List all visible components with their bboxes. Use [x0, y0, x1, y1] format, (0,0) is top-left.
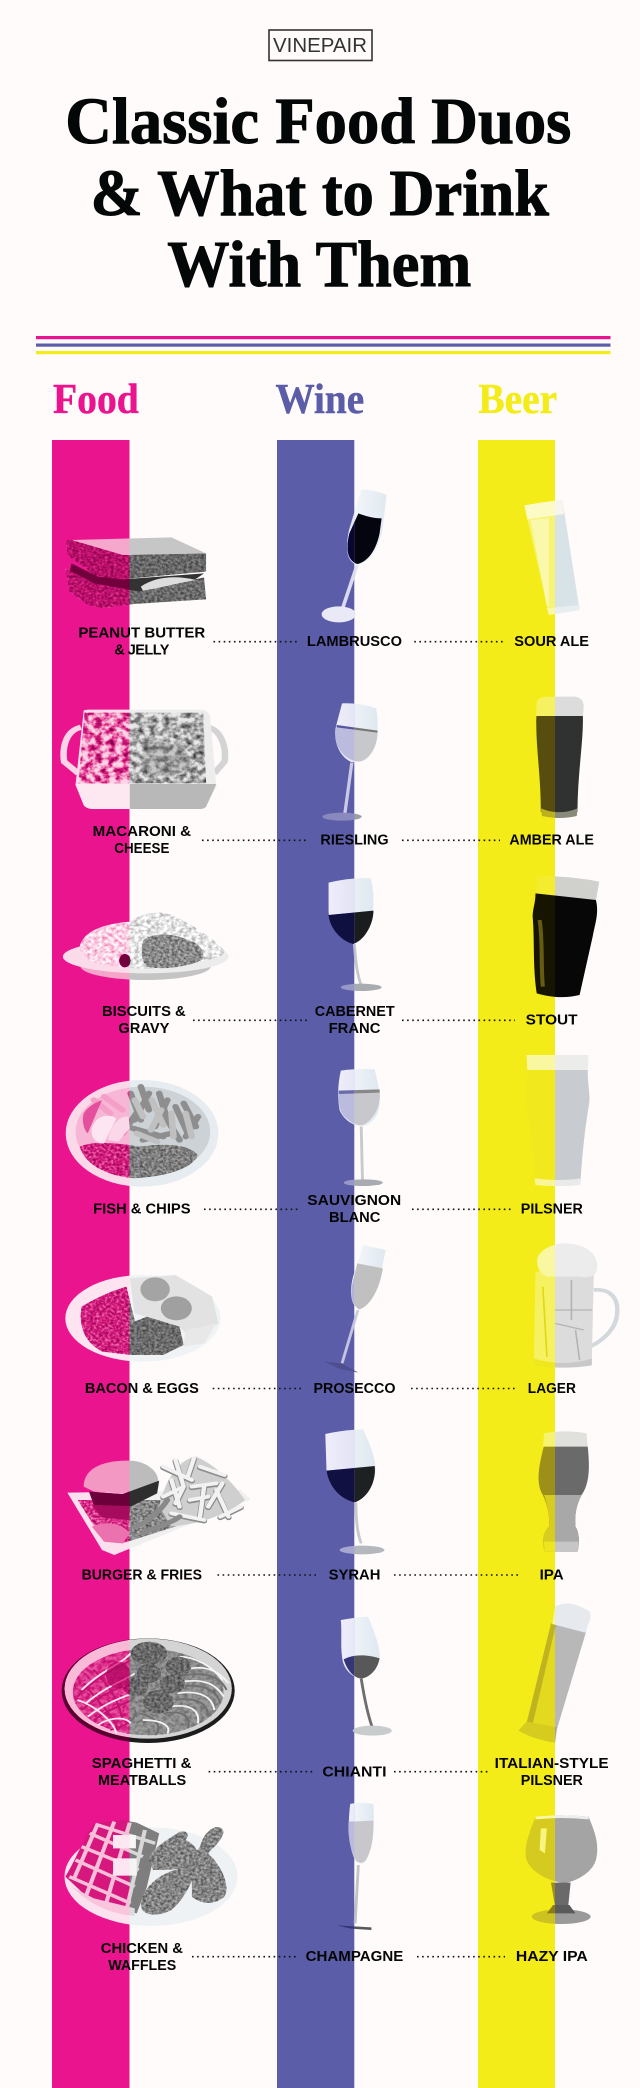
- icon: lager mug: [534, 1243, 617, 1368]
- icon: IPA glass: [539, 1431, 589, 1552]
- row 3 labels: biscuits and gravy: GRAVY: [118, 1021, 170, 1037]
- yellow beer column: [478, 440, 555, 2088]
- row 1 labels: peanut butter and jelly: [78, 626, 589, 658]
- title: [65, 85, 571, 301]
- column heading: Beer: Beer: [478, 377, 557, 423]
- row 6 labels: burger and fries: [82, 1567, 564, 1583]
- title: & What to Drink: [91, 157, 549, 230]
- row 2 labels: macaroni and cheese: RIESLING: [320, 833, 389, 849]
- row 7 labels: spaghetti and meatballs: ITALIAN-STYLE: [495, 1756, 609, 1772]
- row 5 labels: bacon and eggs: [85, 1381, 576, 1397]
- icon: sauvignon blanc glass: [338, 1069, 383, 1186]
- row 8 labels: chicken and waffles: CHAMPAGNE: [306, 1949, 404, 1965]
- row 5 labels: bacon and eggs: LAGER: [528, 1381, 576, 1397]
- icon: amber ale glass: [536, 697, 584, 818]
- row 2 labels: macaroni and cheese: MACARONI &: [93, 824, 192, 840]
- row 1 labels: peanut butter and jelly: SOUR ALE: [514, 634, 589, 650]
- row 4 labels: fish and chips: FISH & CHIPS: [93, 1202, 191, 1218]
- row 3 labels: biscuits and gravy: FRANC: [329, 1021, 381, 1037]
- row 3 labels: biscuits and gravy: CABERNET: [315, 1004, 395, 1020]
- row 6 labels: burger and fries: IPA: [540, 1567, 564, 1583]
- row 4 labels: fish and chips: SAUVIGNON: [307, 1193, 401, 1209]
- logo: VinePair: [269, 30, 372, 60]
- row 3 labels: biscuits and gravy: BISCUITS &: [102, 1004, 186, 1020]
- row 8 labels: chicken and waffles: CHICKEN &: [101, 1941, 183, 1957]
- row 1 labels: peanut butter and jelly: & JELLY: [114, 642, 170, 658]
- row 7 labels: spaghetti and meatballs: PILSNER: [521, 1773, 583, 1789]
- title: With Them: [167, 228, 471, 301]
- row 5 labels: bacon and eggs: BACON & EGGS: [85, 1381, 199, 1397]
- row 8 labels: chicken and waffles: WAFFLES: [108, 1958, 177, 1974]
- title: Classic Food Duos: [65, 85, 571, 158]
- row 3 labels: biscuits and gravy: [102, 1004, 578, 1037]
- column heading: Wine: Wine: [276, 377, 364, 423]
- icon: riesling glass: [322, 703, 378, 821]
- icon: sour ale glass: [524, 500, 580, 615]
- column heading: Food: Food: [53, 377, 139, 423]
- icon: bacon and eggs: [65, 1275, 220, 1362]
- row 8 labels: chicken and waffles: [101, 1941, 588, 1974]
- row 1 labels: peanut butter and jelly: LAMBRUSCO: [307, 634, 402, 650]
- row 3 labels: biscuits and gravy: STOUT: [526, 1012, 578, 1028]
- icon: macaroni and cheese dish: [64, 710, 225, 809]
- row 7 labels: spaghetti and meatballs: MEATBALLS: [98, 1773, 186, 1789]
- icon: chicken and waffles: [64, 1820, 238, 1926]
- row 4 labels: fish and chips: PILSNER: [521, 1202, 583, 1218]
- icon: italian-style pilsner glass: [518, 1603, 591, 1743]
- row 2 labels: macaroni and cheese: [93, 824, 594, 857]
- purple wine column: [277, 440, 354, 2088]
- row 5 labels: bacon and eggs: PROSECCO: [314, 1381, 396, 1397]
- row 6 labels: burger and fries: BURGER & FRIES: [82, 1567, 202, 1583]
- icon: biscuits and gravy: [63, 913, 229, 980]
- icon: pilsner glass: [526, 1055, 590, 1186]
- row 7 labels: spaghetti and meatballs: CHIANTI: [322, 1764, 386, 1780]
- row 2 labels: macaroni and cheese: CHEESE: [114, 841, 170, 857]
- icon: stout glass: [533, 876, 599, 997]
- icon: lambrusco glass: [322, 489, 387, 622]
- row 6 labels: burger and fries: SYRAH: [329, 1567, 380, 1583]
- pink food column: [52, 440, 130, 2088]
- icon: peanut butter and jelly sandwich: [65, 537, 206, 608]
- row 7 labels: spaghetti and meatballs: SPAGHETTI &: [92, 1756, 192, 1772]
- row 4 labels: fish and chips: [93, 1193, 583, 1226]
- row 1 labels: peanut butter and jelly: PEANUT BUTTER: [78, 626, 206, 642]
- row 8 labels: chicken and waffles: HAZY IPA: [516, 1949, 588, 1965]
- icon: champagne glass: [337, 1803, 374, 1930]
- icon: prosecco glass: [324, 1245, 386, 1373]
- icon: chianti glass: [341, 1617, 392, 1736]
- logo: VinePair: VINEPAIR: [273, 35, 367, 57]
- row 7 labels: spaghetti and meatballs: [92, 1756, 609, 1789]
- icon: cabernet franc glass: [329, 878, 382, 991]
- icon: hazy IPA glass: [526, 1815, 597, 1924]
- row 4 labels: fish and chips: BLANC: [329, 1210, 381, 1226]
- icon: syrah glass: [325, 1429, 384, 1554]
- row 2 labels: macaroni and cheese: AMBER ALE: [509, 833, 594, 849]
- tricolour divider: [36, 336, 610, 354]
- icon: spaghetti and meatballs: [62, 1638, 235, 1743]
- icon: fish and chips: [66, 1080, 218, 1187]
- icon: burger and fries: [67, 1457, 251, 1555]
